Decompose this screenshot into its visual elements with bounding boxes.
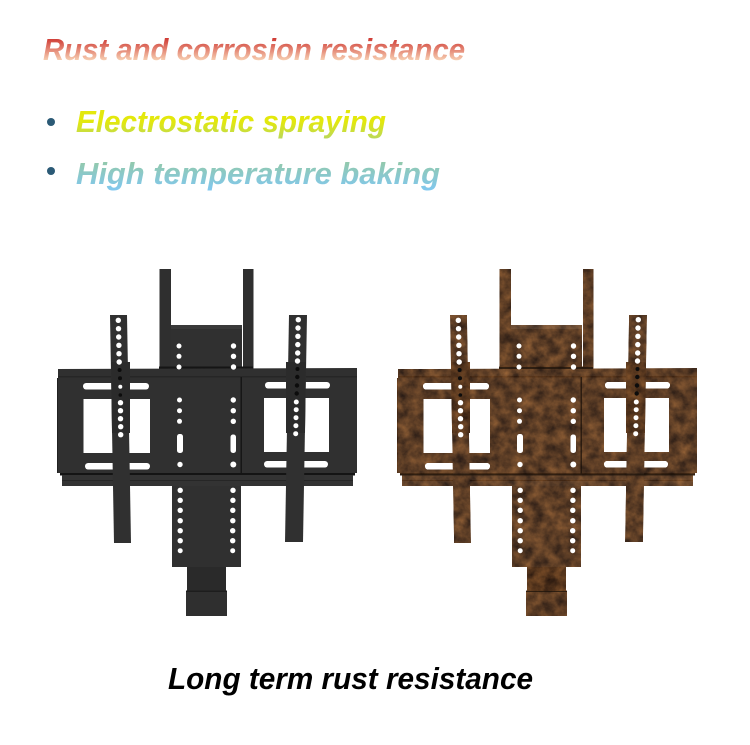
title: Rust and corrosion resistance (43, 32, 465, 67)
caption: Long term rust resistance (168, 661, 533, 696)
bullet dot: high temperature baking (47, 167, 55, 175)
bullet dot: electrostatic spraying (47, 118, 55, 126)
bullet text: electrostatic spraying: Electrostatic spraying (76, 104, 386, 139)
rusted TV mount (390, 262, 705, 622)
black coated TV mount (57, 269, 357, 616)
bullet list (47, 104, 440, 191)
bullet text: high temperature baking: High temperature baking (76, 156, 440, 191)
